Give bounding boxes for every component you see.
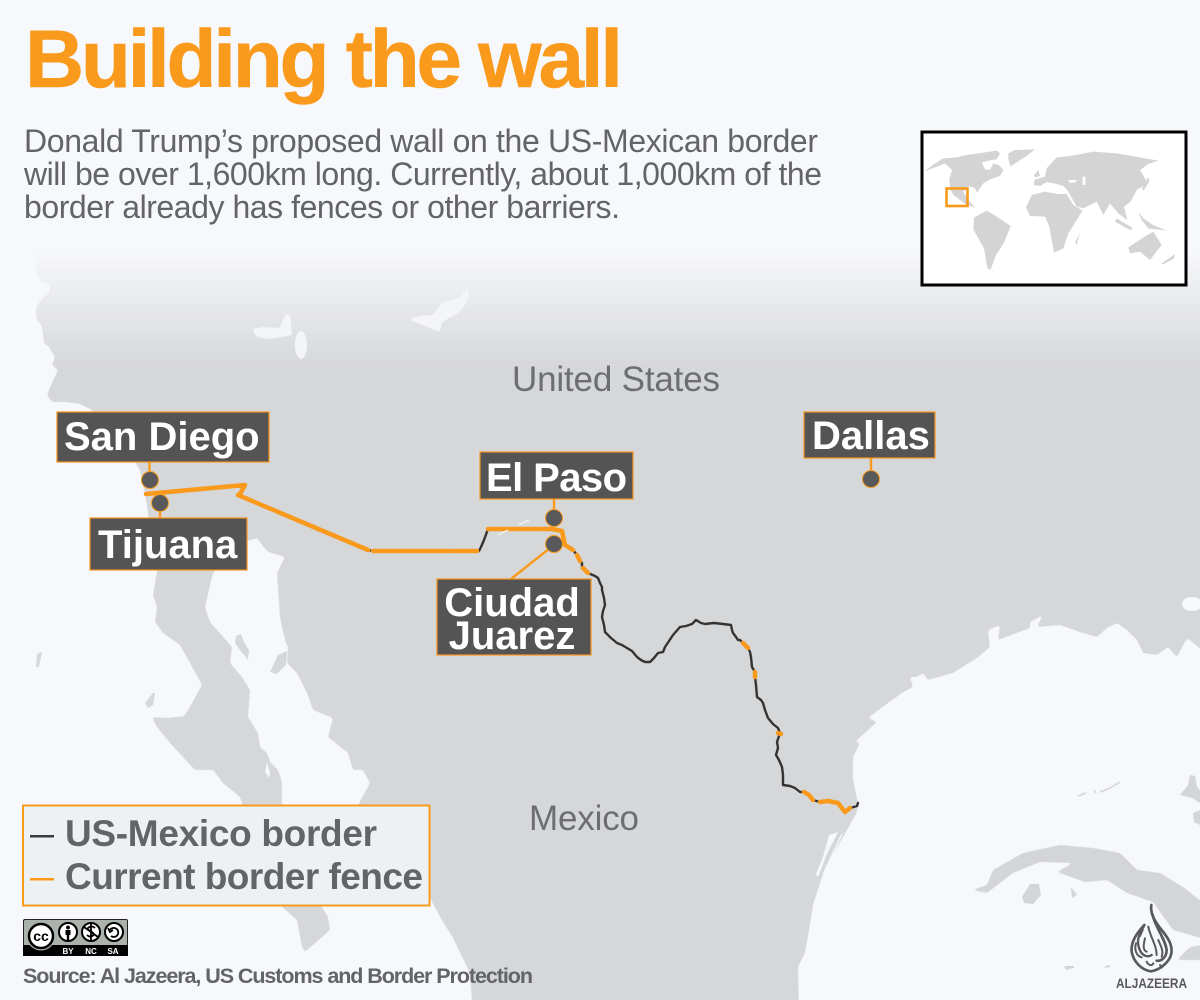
inset location marker	[946, 188, 968, 206]
island: Isla de la Juventud	[1022, 884, 1041, 904]
badge body	[24, 920, 128, 956]
island: Tiburon	[270, 651, 287, 674]
source line: Source: Al Jazeera, US Customs and Border Protection	[23, 964, 533, 988]
marker	[152, 494, 168, 512]
name: Juarez	[449, 614, 575, 658]
legend swatch: fence	[30, 878, 54, 880]
islands: Bahamas	[1180, 775, 1200, 825]
legend box	[23, 806, 430, 906]
marker	[862, 470, 880, 488]
island: Gulf of California north	[235, 634, 249, 660]
islands: small Caribbean cays	[1064, 887, 1110, 970]
inset continents	[924, 149, 1175, 272]
intro text: will be over 1,600km long. Currently, about 1,000km of the	[23, 156, 822, 192]
legend text: border: US-Mexico border	[65, 813, 377, 854]
intro text: Donald Trump’s proposed wall on the US-Mexican border	[24, 123, 818, 159]
box	[480, 452, 633, 499]
legend text: fence: Current border fence	[65, 856, 423, 897]
by figure	[65, 926, 70, 940]
current border fence line	[146, 485, 850, 812]
cc text: cc	[33, 928, 49, 944]
box	[804, 412, 935, 458]
marker	[546, 536, 562, 552]
islands: Florida Keys	[1078, 782, 1120, 796]
island: Baja Pacific islet	[145, 693, 155, 708]
title: Building the wall	[25, 14, 623, 105]
lake: Great Salt Lake area	[252, 314, 292, 339]
stray white rail lines near El Paso	[498, 520, 529, 535]
Al Jazeera logo	[1116, 905, 1187, 991]
lagoon: Laguna Madre	[813, 834, 842, 907]
marker	[142, 472, 158, 488]
sa label: SA	[107, 947, 119, 956]
badge strip	[23, 945, 128, 956]
US-Mexico border line	[368, 529, 858, 808]
connector	[870, 458, 872, 473]
box	[437, 579, 591, 655]
logo wordmark: ALJAZEERA	[1116, 975, 1187, 991]
cc disc	[29, 924, 53, 948]
sa icon	[105, 923, 123, 941]
connector	[159, 509, 161, 518]
intro text	[23, 123, 822, 225]
sa glyph	[108, 928, 118, 937]
label: Ciudad Juarez	[437, 536, 591, 658]
island: Pacific islet	[36, 652, 42, 667]
lake: northern reservoir	[409, 286, 469, 332]
by icon	[59, 923, 77, 941]
nc icon	[82, 923, 100, 941]
name: El Paso	[486, 456, 627, 500]
inset frame	[922, 132, 1186, 285]
name: Ciudad	[444, 581, 580, 625]
lake: narrow inland lake	[295, 331, 307, 359]
Creative Commons badge	[23, 920, 128, 956]
legend swatch: border	[30, 835, 54, 838]
by label: BY	[62, 947, 74, 956]
label: San Diego	[57, 412, 269, 488]
land: United States and Mexico	[35, 250, 1200, 1000]
intro text: border already has fences or other barriers.	[24, 189, 620, 225]
island: Hispaniola edge	[1177, 943, 1200, 960]
box	[90, 518, 247, 570]
name: Dallas	[812, 414, 930, 458]
island: Espiritu Santo gulf slit	[265, 762, 270, 778]
country label: United States: United States	[512, 360, 720, 399]
cc circle	[26, 922, 56, 950]
lagoon: coast notches	[816, 832, 838, 877]
lake: coastal Louisiana lake	[1182, 597, 1200, 611]
label: Tijuana	[90, 494, 247, 570]
nc label: NC	[85, 947, 97, 956]
label: Dallas	[804, 412, 935, 488]
name: Tijuana	[98, 523, 238, 567]
connector	[553, 499, 555, 512]
nc glyph	[84, 924, 98, 940]
connector	[511, 548, 550, 579]
logo calligraphy	[1132, 905, 1172, 971]
label: El Paso	[480, 452, 633, 526]
legend	[23, 806, 430, 906]
country label: Mexico: Mexico	[529, 799, 639, 838]
marker	[546, 510, 562, 526]
inset locator world map	[922, 132, 1186, 285]
map: North America and Caribbean landmass	[35, 250, 1200, 1000]
connector	[148, 462, 151, 474]
name: San Diego	[64, 415, 260, 459]
island: Cuba	[972, 845, 1200, 942]
box	[57, 412, 269, 462]
